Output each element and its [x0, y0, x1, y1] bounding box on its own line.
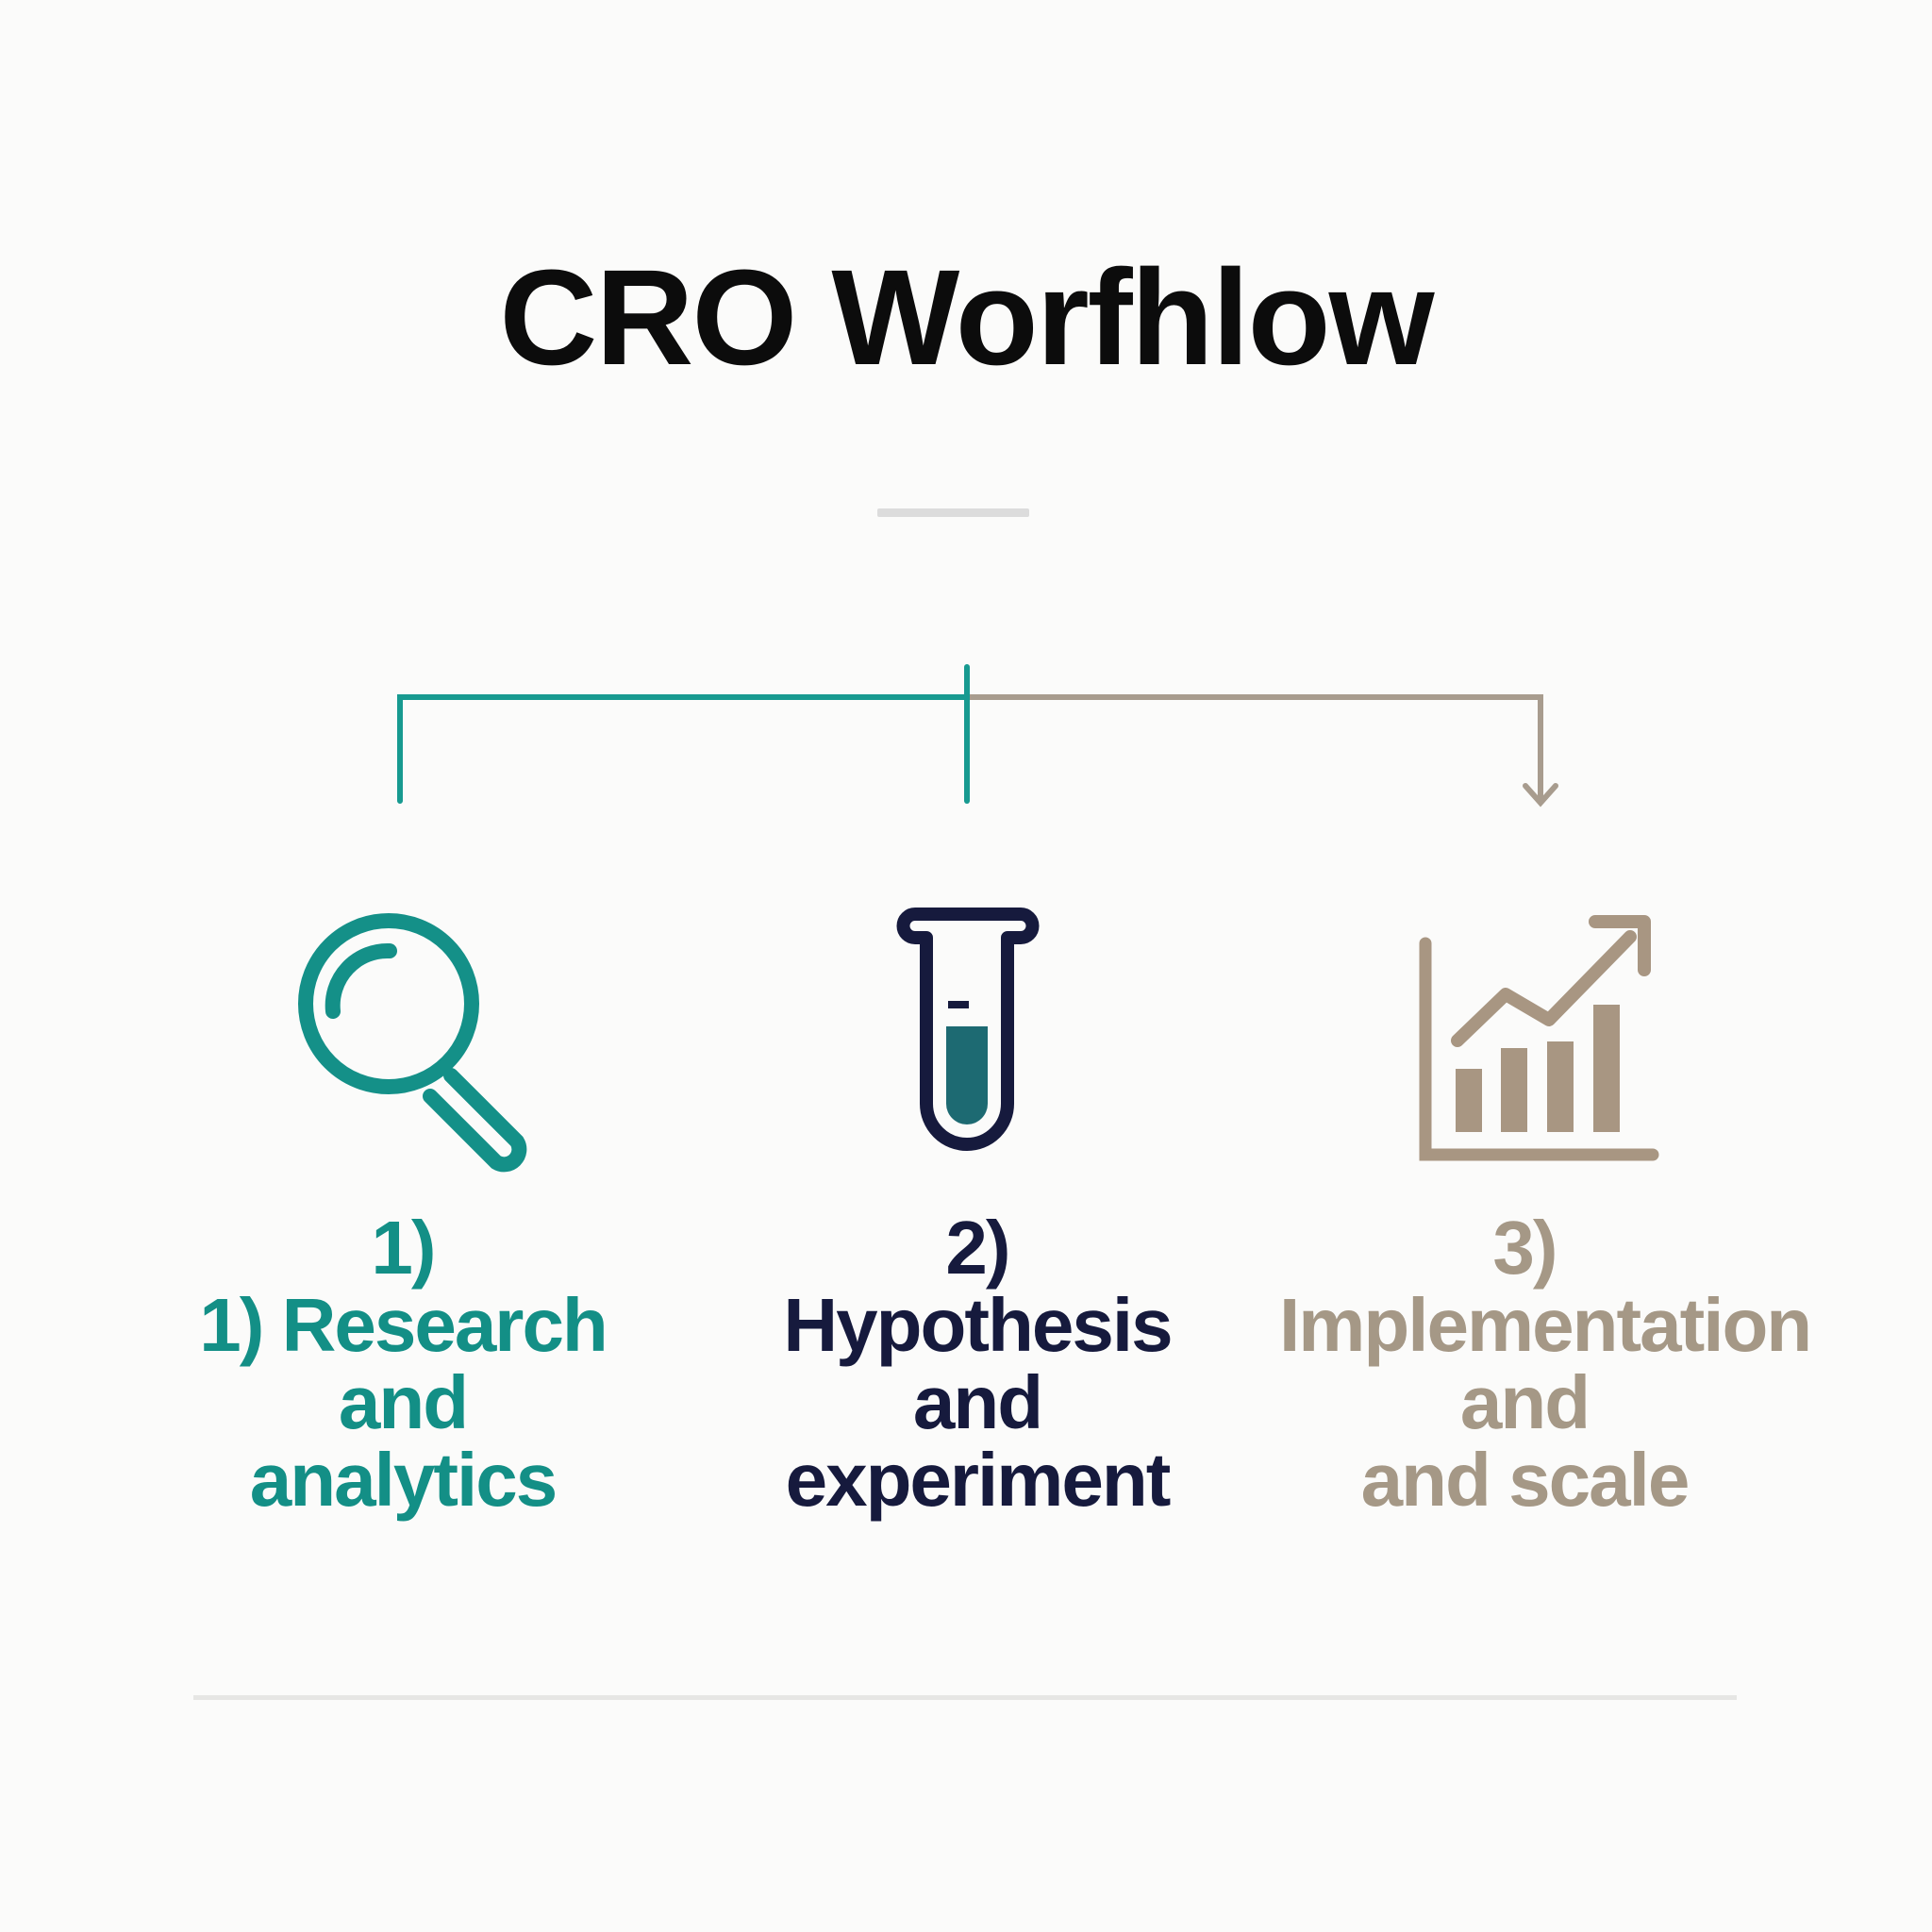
divider under title [877, 508, 1029, 517]
step 2 label [783, 1206, 1172, 1522]
step 2 label: 2) [945, 1206, 1009, 1290]
step 2 label: and [913, 1360, 1041, 1444]
step 1 label: 1) Research [199, 1283, 607, 1367]
connector lines [400, 667, 1556, 803]
title: CRO Worfhlow [499, 242, 1433, 393]
step 3 label: 3) [1492, 1206, 1557, 1290]
step 3 label: and [1460, 1360, 1589, 1444]
step 3 label: Implementation [1279, 1283, 1810, 1367]
icon: test tube [904, 914, 1032, 1144]
step 1 label: 1) [371, 1206, 435, 1290]
bottom divider [193, 1695, 1737, 1700]
step 2 label: Hypothesis [783, 1283, 1172, 1367]
step 1 label: analytics [250, 1438, 556, 1522]
step 2 label: experiment [786, 1438, 1169, 1522]
step 3 label: and scale [1361, 1438, 1688, 1522]
step 1 label: and [339, 1360, 467, 1444]
icon: magnifier [306, 921, 519, 1164]
step 3 label [1279, 1206, 1810, 1522]
icon: growth chart [1425, 922, 1653, 1155]
step 1 label [199, 1206, 607, 1522]
